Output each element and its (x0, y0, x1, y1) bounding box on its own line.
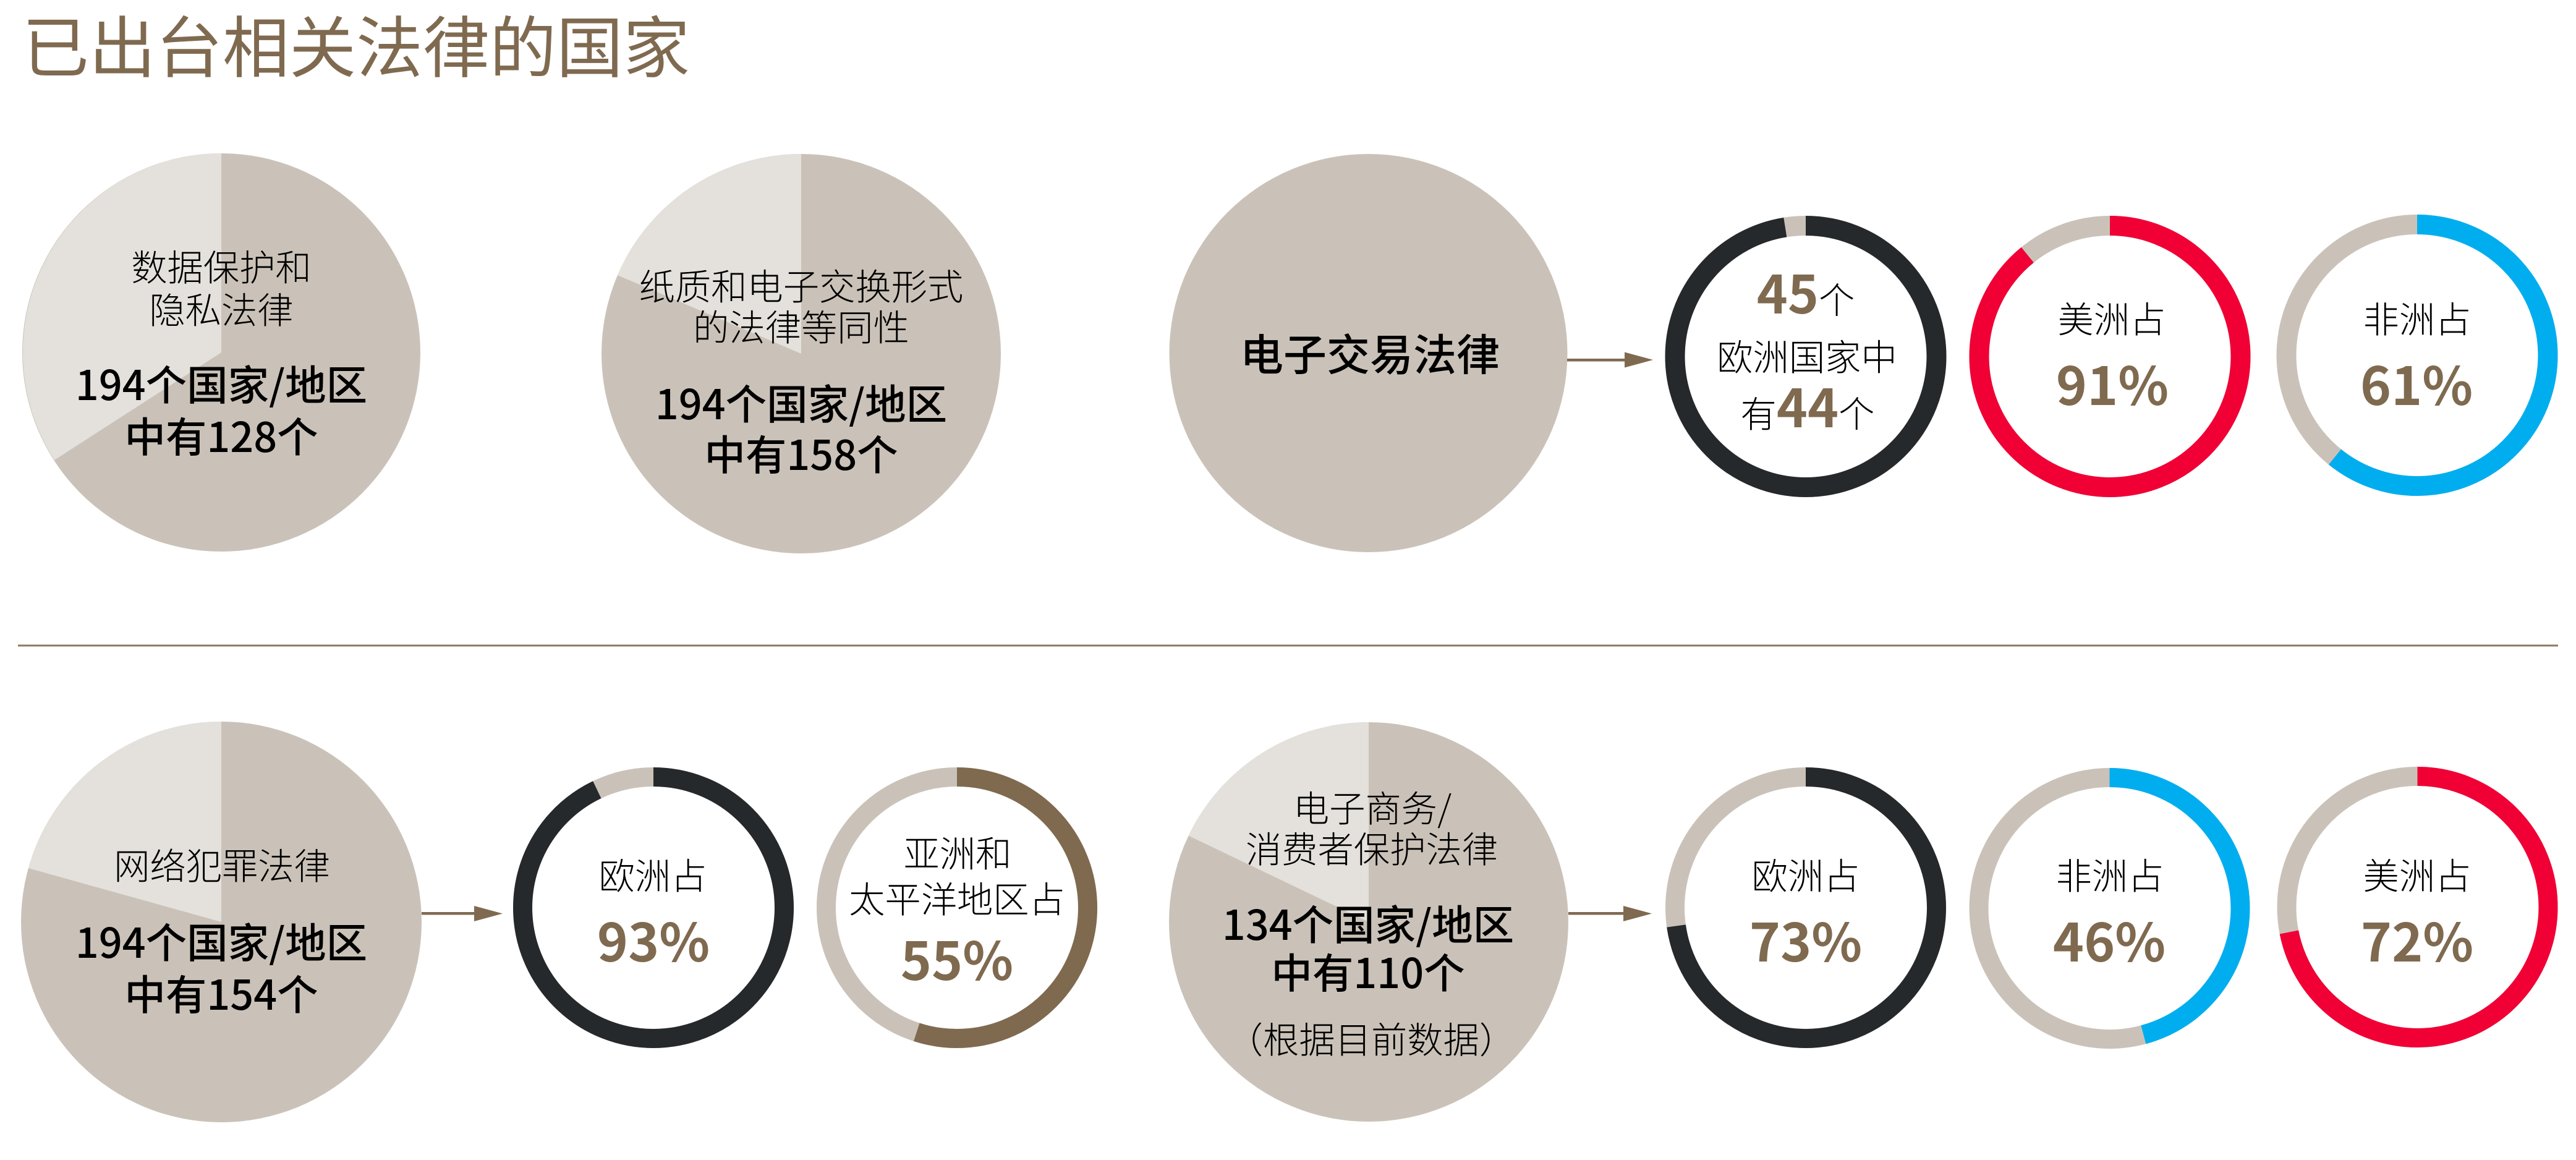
ring: Americas 91%: 美洲占 (2058, 291, 2166, 343)
panel: paper and electronic equivalence law pie: 194个国家/地区 (655, 372, 947, 432)
panel: paper and electronic equivalence law pie: 的法律等同性 (693, 299, 909, 351)
panel: data protection and privacy law pie: 数据保护和 (131, 239, 312, 291)
ring: Americas 72% (2287, 777, 2548, 1038)
ring: Europe 73%: 73% (1749, 901, 1862, 977)
ring: Africa 61%: 非洲占 (2363, 291, 2471, 343)
panel: cybercrime law pie (21, 722, 422, 1122)
panel: e-commerce consumer protection law pie: 中有110个 (1271, 941, 1465, 1000)
ring: Europe 93% (523, 777, 784, 1039)
panel: e-commerce consumer protection law pie: 消费者保护法律 (1246, 821, 1498, 873)
ring: Europe 44 of 45: 45个 (1757, 253, 1855, 329)
panel: cybercrime law pie: 194个国家/地区 (75, 911, 367, 970)
ring: Europe 44 of 45: 有44个 (1741, 367, 1874, 443)
ring: Asia-Pacific 55%: 55% (901, 919, 1013, 996)
ring: Europe 73% (1675, 777, 1936, 1039)
arrow: cybercrime to Europe ring (422, 906, 503, 921)
ring: Europe 93%: 欧洲占 (599, 847, 707, 900)
ring: Asia-Pacific 55% (826, 777, 1088, 1039)
ring: Africa 46%: 非洲占 (2056, 847, 2164, 900)
panel: data protection and privacy law pie: 中有128个 (124, 405, 318, 464)
ring: Europe 93%: 93% (597, 901, 710, 977)
panel: e-commerce consumer protection law pie (1169, 722, 1568, 1122)
panel: electronic transactions law pie: 电子交易法律 (1240, 321, 1500, 383)
ring: Americas 72%: 美洲占 (2363, 847, 2471, 900)
panel: data protection and privacy law pie: 194个国家/地区 (75, 353, 367, 412)
panel: electronic transactions law pie (1170, 154, 1568, 552)
ring: Africa 61% (2286, 224, 2548, 486)
ring: Asia-Pacific 55%: 太平洋地区占 (849, 871, 1065, 923)
ring: Europe 44 of 45 (1675, 226, 1936, 487)
ring: Americas 72%: 72% (2361, 901, 2473, 977)
panel: paper and electronic equivalence law pie: 纸质和电子交换形式 (639, 258, 963, 310)
panel: paper and electronic equivalence law pie: 中有158个 (704, 423, 898, 482)
panel: data protection and privacy law pie (22, 153, 420, 552)
panel: cybercrime law pie: 中有154个 (124, 963, 318, 1022)
ring: Africa 46% (1979, 778, 2240, 1039)
divider (18, 644, 2558, 647)
ring: Asia-Pacific 55%: 亚洲和 (904, 825, 1011, 877)
panel: cybercrime law pie: 网络犯罪法律 (114, 837, 330, 890)
panel: e-commerce consumer protection law pie: 134个国家/地区 (1222, 893, 1514, 952)
ring: Africa 61%: 61% (2360, 344, 2473, 420)
panel: paper and electronic equivalence law pie (601, 154, 1001, 553)
panel: data protection and privacy law pie: 隐私法律 (149, 281, 294, 334)
ring: Africa 46%: 46% (2053, 901, 2166, 977)
ring: Americas 91%: 91% (2056, 344, 2169, 420)
panel: e-commerce consumer protection law pie: （根据目前数据） (1227, 1011, 1515, 1064)
ring: Americas 91% (1979, 226, 2240, 487)
ring: Europe 44 of 45: 欧洲国家中 (1717, 328, 1897, 381)
arrow: transactions to Europe ring (1567, 352, 1653, 367)
arrow: e-commerce to Europe ring (1568, 906, 1652, 921)
panel: e-commerce consumer protection law pie: 电子商务/ (1293, 780, 1452, 832)
ring: Europe 73%: 欧洲占 (1752, 847, 1860, 900)
